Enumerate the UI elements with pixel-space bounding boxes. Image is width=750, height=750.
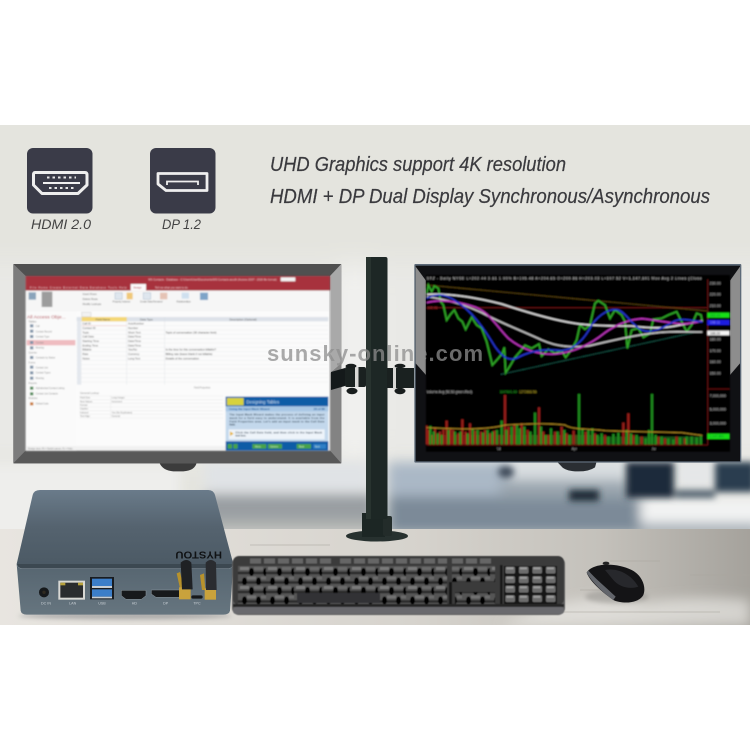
field properties: New Values: [80, 401, 93, 403]
table design grid: Contact ID: [82, 326, 96, 330]
moving average lines: [427, 294, 702, 359]
port: HDMI: [121, 590, 146, 599]
field properties: Format: [80, 404, 88, 407]
table design grid: Topic: [82, 330, 90, 334]
right monitor screen: stock chart: 1272866.56: [519, 390, 537, 394]
left monitor screen: database software: [26, 276, 330, 451]
field properties: Indexed: [80, 412, 89, 414]
right monitor stand nub: [558, 462, 596, 472]
date axis: Jul: [652, 447, 656, 451]
field properties: Design view. F6 = Switch panes. F1 = Help.: [28, 448, 73, 451]
price axis: 160.00: [710, 360, 721, 364]
field properties: Text Align: [80, 415, 91, 418]
table design grid: Ending Time: [82, 343, 98, 347]
price axis: 7,000,000: [710, 394, 726, 398]
price axis: 170.00: [710, 349, 721, 353]
navigation pane: Reports: [29, 382, 38, 385]
port: DP: [151, 590, 180, 597]
table design grid: Date/Time: [128, 335, 141, 339]
navigation pane: Contacts by Status: [36, 357, 56, 360]
ribbon: Modify Lookups: [83, 302, 102, 306]
price axis: 5,000,000: [710, 408, 726, 412]
date axis: Apr: [572, 447, 578, 451]
price axis: 210.00: [710, 304, 721, 308]
navigation pane: Contact Types: [36, 372, 51, 375]
blurred office background: [0, 125, 750, 539]
antenna right: [200, 560, 217, 600]
right monitor screen: stock chart: [426, 275, 730, 452]
table design grid: Currency: [128, 352, 140, 356]
tutorial panel: Designing Tables: mask for a field easy to understand. It is available from the: [229, 416, 325, 420]
tutorial panel: Designing Tables: 26 of 86: [314, 407, 325, 411]
table design grid: Date/Time: [128, 343, 141, 347]
field properties: Yes (No Duplicates): [112, 411, 132, 414]
navigation pane: [26, 314, 76, 406]
price axis: 230.00: [710, 282, 721, 286]
table design grid: Topic of conversation (30 character limit): [166, 330, 216, 334]
tutorial panel: Designing Tables: Back: [299, 446, 305, 448]
label: HDMI 2.0: HDMI 2.0: [31, 217, 92, 232]
table design grid: AutoNumber: [128, 322, 144, 326]
navigation pane: Call: [36, 326, 40, 328]
table design grid: Call ID: [82, 322, 91, 326]
table design grid: Details of the conversation: [166, 356, 199, 360]
ribbon: Property Indexes: [113, 300, 131, 303]
port labels: DC IN: [41, 602, 51, 606]
tutorial panel: Designing Tables: Click the Call Date field, and then click in the Input Mask: [235, 430, 323, 434]
mini PC: [17, 490, 233, 619]
table design grid: Description (Optional): [229, 317, 257, 321]
headline line 1: UHD Graphics support 4K resolution: [270, 154, 566, 176]
navigation pane: Contact List Contacts: [36, 393, 59, 396]
table design grid: Short Text: [128, 330, 141, 334]
desk surface: [0, 529, 750, 626]
port: Type-C: [191, 595, 203, 599]
table design grid: Starting Time: [82, 339, 99, 343]
mouse: [585, 562, 648, 603]
price flags: 202.44: [710, 313, 720, 317]
port: DC in: [39, 587, 49, 597]
navigation pane: Modules: [29, 398, 38, 400]
tutorial panel: Designing Tables: Next: [315, 445, 320, 448]
window title bar: MS Contacts : Database - C:\Users\User\Documents\MS Contacts.accdb (Access 2007 - 2016 file format): [148, 277, 277, 281]
monitor mount arms: [331, 364, 414, 394]
chart header text: STZ - Daily NYSE L=202.44 3.61 1.90% B=195.48 A=204.65 O=200.86 H=203.03 L=197.52 V=1,147,691 Mov Avg 2 Lines (Close: [427, 276, 702, 280]
navigation pane: All Access Obje...: [27, 314, 66, 320]
table design grid: Field Name: [96, 317, 111, 321]
window title bar: Design: [133, 285, 142, 289]
ribbon: Create Data Rename/: [140, 300, 163, 303]
navigation pane: Contact: [36, 341, 44, 344]
field properties: Field Properties: [194, 386, 211, 389]
ribbon: Relationships: [177, 300, 191, 303]
table design grid: Yes/No: [128, 348, 137, 352]
navigation pane: Global Code: [36, 403, 49, 405]
navigation pane: Contact Type: [36, 335, 50, 338]
table design grid: Billable: [82, 348, 92, 352]
table design grid: Billing rate (leave blank if not billable): [166, 352, 212, 356]
keyboard: [232, 556, 565, 615]
left monitor stand nub: [159, 463, 197, 471]
field properties: General: [112, 415, 120, 418]
tutorial panel: Designing Tables: Options: [270, 445, 279, 448]
navigation pane: Tables: [29, 319, 37, 323]
volume chart: Volume Avg (50,50,green,Red): [427, 390, 472, 394]
label: DP 1.2: DP 1.2: [162, 217, 201, 232]
right monitor screen: stock chart: 1147691.00: [500, 390, 517, 394]
port labels: LAN: [69, 602, 77, 606]
tutorial panel: Designing Tables: Field Properties area. Let's add an input mask to the Call Date: [229, 419, 325, 423]
field properties: General Lookup: [80, 391, 99, 395]
photo panel: [0, 125, 750, 626]
navigation pane: Contact List: [36, 366, 48, 369]
field properties: [26, 386, 226, 451]
navigation pane: Forms: [29, 361, 36, 364]
monitor pole and base: [346, 257, 408, 542]
window title bar: File Home Create External Data Database Tools Help: [30, 285, 127, 289]
date axis: [427, 445, 708, 451]
table design grid: Date/Time: [128, 339, 141, 343]
price axis: 180.00: [710, 338, 721, 342]
field properties: Field Size: [80, 398, 91, 400]
tutorial panel: Designing Tables: Designing Tables: [246, 399, 279, 404]
price axis: 150.00: [710, 371, 721, 375]
field properties: Long Integer: [112, 397, 125, 400]
navigation pane: Contact Record: [36, 330, 53, 333]
table design grid: [77, 312, 328, 385]
port: LAN: [58, 581, 85, 600]
ribbon: Delete Rows: [83, 297, 98, 301]
brand label: HYSTOU: [175, 549, 222, 560]
table design grid: Call Date: [82, 335, 94, 339]
navigation pane: Queries: [29, 352, 38, 355]
mini PC shadow: [18, 613, 232, 619]
tutorial panel: Designing Tables: text box.: [235, 434, 247, 438]
price line: [427, 285, 702, 373]
infographic canvas: [0, 125, 750, 625]
navigation pane: Meeting: [36, 347, 45, 350]
field properties: Caption: [80, 408, 89, 411]
tutorial panel: Designing Tables: field.: [229, 423, 236, 427]
price axis: [708, 279, 730, 445]
table design grid: Notes: [82, 356, 90, 360]
tutorial panel: Designing Tables: [226, 397, 328, 451]
price flags: 188.00: [710, 331, 720, 335]
tutorial panel: Designing Tables: Menu: [255, 446, 262, 448]
table design grid: Number: [128, 326, 138, 330]
ribbon: [26, 290, 330, 308]
right monitor frame: [414, 264, 741, 463]
tutorial panel: Designing Tables: The Input Mask Wizard makes the process of defining an input: [229, 413, 324, 417]
mini PC body: [17, 490, 233, 615]
window title bar: Tell me what you want to do: [155, 285, 188, 289]
ribbon: Insert Rows: [83, 292, 97, 296]
price flags: 198.11: [710, 321, 720, 325]
port labels: USB: [98, 602, 106, 606]
port labels: [41, 602, 201, 606]
left monitor: [13, 264, 341, 471]
trend lines: [427, 285, 708, 374]
price axis: 3,000,000: [710, 421, 726, 425]
date axis: '18: [496, 447, 501, 451]
table design grid: Long Text: [128, 356, 140, 360]
headline line 2: HDMI + DP Dual Display Synchronous/Asynchronous: [270, 186, 710, 208]
price flags: 1,147,691: [709, 435, 724, 439]
right monitor: [414, 264, 741, 471]
field properties: Increment: [112, 400, 122, 403]
window title bar: [26, 276, 330, 291]
heading: HDMI icon tile: [27, 148, 92, 214]
right monitor screen: stock chart: 205.96: [427, 306, 438, 310]
price axis: 220.00: [710, 293, 721, 297]
navigation pane: Meeting: [36, 377, 45, 380]
port labels: HD: [132, 602, 137, 606]
tutorial panel: Designing Tables: Using the Input Mask Wizard: [229, 407, 270, 411]
table design grid: Data Type: [140, 317, 153, 321]
heading: DP icon tile: [150, 148, 216, 214]
price flags: [707, 313, 730, 439]
port: USB: [90, 577, 114, 599]
left monitor frame: [13, 264, 341, 463]
watermark: sunsky-online.com: [267, 341, 483, 366]
table design grid: Is the time for this conversation billable?: [166, 348, 216, 352]
navigation pane: Alphabetical Contact Listing: [36, 387, 65, 390]
port labels: TPC: [193, 602, 201, 606]
antenna left: [177, 560, 193, 599]
port labels: DP: [163, 602, 169, 606]
table design grid: Rate: [82, 352, 89, 356]
